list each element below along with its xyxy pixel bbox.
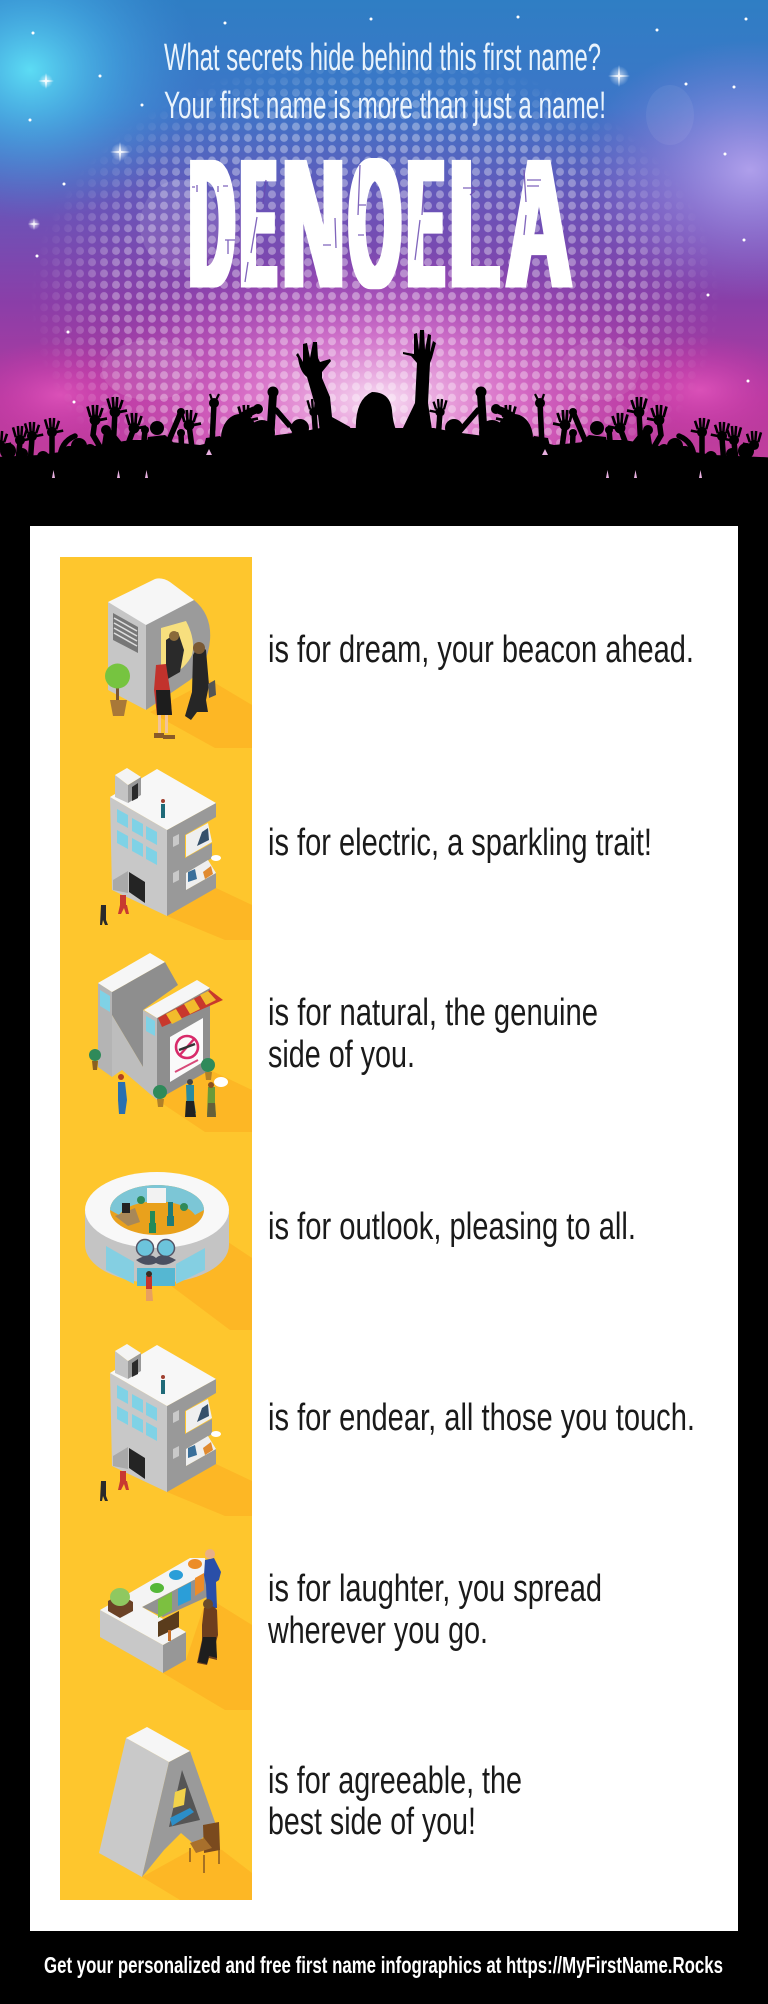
text: A [507,120,571,326]
distress marks on title [192,165,541,282]
name title DENOELA: D [190,120,234,326]
icon: letter A building [99,1727,252,1900]
statement: A: best side of you! [268,1801,476,1843]
icon: letter L recycling station [100,1549,252,1710]
name title DENOELA: N [283,120,344,326]
icon: letter O building [85,1172,252,1330]
tree [116,688,119,702]
statement: L: is for laughter, you spread [268,1568,602,1610]
header question text [164,37,606,127]
icon: letter N building [89,953,252,1132]
statement: L [267,1568,602,1652]
name title DENOELA: L [450,120,498,326]
statement: A: is for agreeable, the [268,1760,522,1802]
name title DENOELA: E [408,120,443,326]
statement: O: is for outlook, pleasing to all. [268,1206,636,1248]
statement: N [268,992,598,1076]
people [166,632,184,680]
small people [161,799,165,803]
awning [158,990,223,1027]
statement: E: is for electric, a sparkling trait! [268,822,652,864]
plants and people [89,1049,101,1061]
yellow illustration column [60,557,252,1900]
statement: L: wherever you go. [267,1610,488,1652]
name title DENOELA [190,120,571,326]
icon: letter D building [105,578,252,748]
white content panel [30,526,738,1931]
statement: N: side of you. [268,1034,415,1076]
icon: letter E building [100,768,252,940]
crowd silhouette [0,330,768,532]
raised right arm [402,330,436,430]
name title DENOELA: E [241,120,275,326]
name title DENOELA: O [349,120,400,326]
raised left arm [296,342,353,436]
statement: A [268,1760,522,1843]
icon: letter E building repeated [100,1344,252,1516]
no smoking sign [170,1018,203,1082]
central head [356,392,398,434]
header background: stage lights [0,0,768,458]
statement: N: is for natural, the genuine [268,992,598,1034]
